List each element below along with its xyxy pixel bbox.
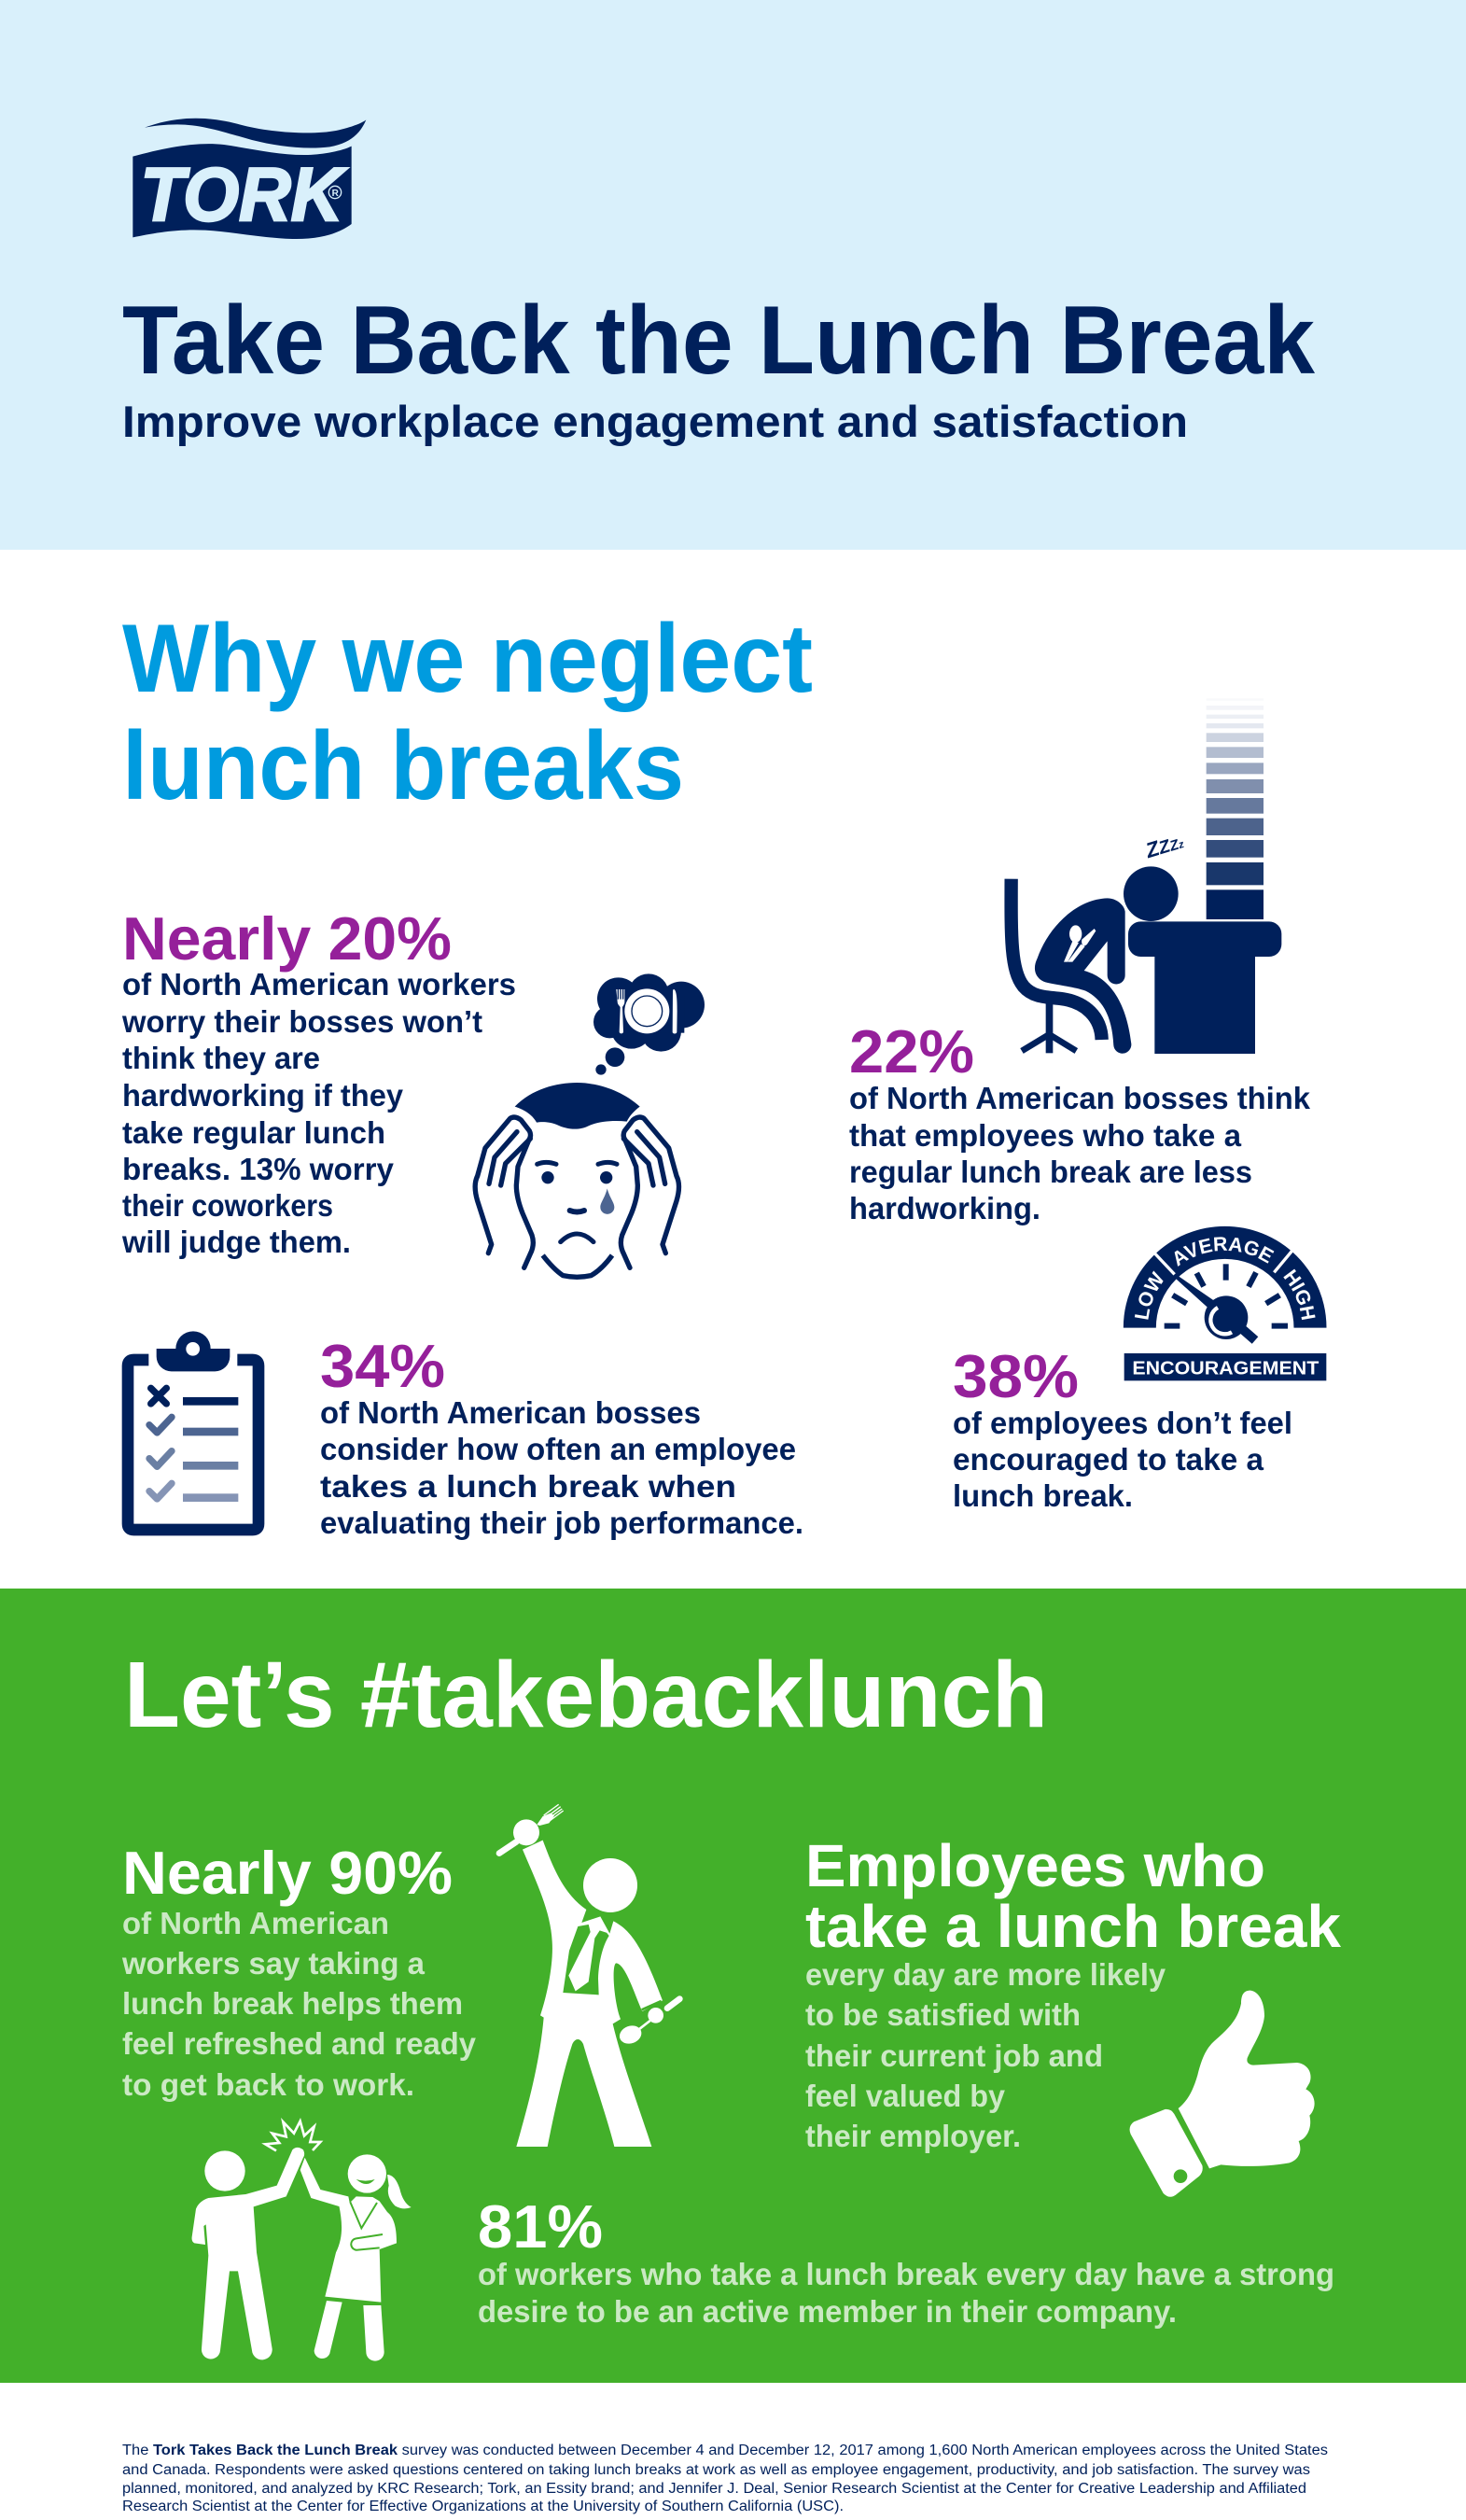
stat: 34%: consider how often an employee xyxy=(320,1432,796,1466)
panel: let's take back lunch xyxy=(0,1589,1466,2383)
panel: header xyxy=(0,0,1466,550)
stat: nearly 20%: worry their bosses won’t xyxy=(121,1004,482,1039)
stat: nearly 90%: to get back to work. xyxy=(122,2067,414,2102)
icon: two people high-fiving xyxy=(192,2121,412,2361)
stat: nearly 20%: breaks. 13% worry xyxy=(122,1152,395,1186)
stat: employees who take a lunch break: their employer. xyxy=(805,2119,1021,2153)
footnote: survey methodology: planned, monitored, and analyzed by KRC Research; Tork, an Essity brand; and Jennifer J. Deal, Senior Research Scientist at the Center for Creative Leadership and Affiliated xyxy=(122,2481,1306,2497)
stat: nearly 90%: workers say taking a xyxy=(121,1946,426,1981)
stat: nearly 90% xyxy=(121,1839,477,2102)
stat: 34%: 34% xyxy=(320,1332,445,1400)
stat: employees who take a lunch break: to be satisfied with xyxy=(805,1997,1081,2032)
heading: why we neglect: Why we neglect xyxy=(122,605,813,713)
stat: employees who take a lunch break xyxy=(805,1832,1341,2153)
heading: why we neglect: lunch breaks xyxy=(122,712,684,820)
logo: Tork: TORK xyxy=(141,153,347,237)
logo: Tork: R xyxy=(332,189,339,199)
panel: why we neglect lunch breaks xyxy=(121,605,1327,1540)
stat: 81%: of workers who take a lunch break every day have a strong xyxy=(478,2257,1334,2291)
footnote: survey methodology: The Tork Takes Back the Lunch Break survey was conducted between December 4 and December 12, 2017 among 1,600 North American employees across the United States xyxy=(122,2443,1328,2458)
stat: employees who take a lunch break: their current job and xyxy=(805,2038,1103,2073)
heading: why we neglect xyxy=(122,605,813,820)
stat: nearly 20% xyxy=(121,904,516,1259)
logo: Tork xyxy=(133,119,366,239)
subtitle: Improve workplace engagement and satisfaction xyxy=(122,397,1188,446)
stat: nearly 20%: will judge them. xyxy=(121,1225,351,1259)
stat: nearly 90%: feel refreshed and ready xyxy=(122,2026,477,2061)
stat: nearly 20%: think they are xyxy=(122,1041,320,1075)
stat: 22%: that employees who take a xyxy=(849,1118,1242,1153)
stat: 22%: of North American bosses think xyxy=(849,1081,1311,1115)
stat: 34%: of North American bosses xyxy=(320,1395,701,1430)
stat: employees who take a lunch break: feel valued by xyxy=(805,2079,1006,2113)
icon: encouragement gauge: LOW xyxy=(1135,1271,1163,1320)
footnote: survey methodology: and Canada. Respondents were asked questions centered on taking lunch breaks at work as well as employee engagement, productivity, and job satisfaction. The survey was xyxy=(122,2462,1310,2478)
stat: nearly 90%: of North American xyxy=(122,1906,389,1940)
icon: encouragement gauge: ENCOURAGEMENT xyxy=(1132,1357,1319,1379)
stat: 81% xyxy=(478,2192,1334,2329)
stat: 22%: regular lunch break are less xyxy=(849,1155,1252,1189)
stat: nearly 90%: lunch break helps them xyxy=(122,1986,463,2021)
stat: employees who take a lunch break: every day are more likely xyxy=(805,1957,1166,1992)
footnote: survey methodology: Research Scientist at the Center for Effective Organizations at the University of Southern California (USC). xyxy=(122,2499,844,2514)
icon: person asleep at desk with paper stack: ZZZz xyxy=(1142,828,1186,862)
stat: 22% xyxy=(849,1017,1311,1225)
stat: nearly 20%: of North American workers xyxy=(122,967,516,1001)
stat: 34%: takes a lunch break when xyxy=(320,1469,736,1504)
icon: worried face with thought cloud xyxy=(475,973,705,1277)
icon: encouragement gauge xyxy=(1124,1226,1327,1381)
stat: 38%: lunch break. xyxy=(953,1478,1133,1513)
heading: hashtag: Let’s #takebacklunch xyxy=(124,1643,1048,1747)
icon: man raising fork and spoon xyxy=(499,1804,679,2147)
stat: nearly 90%: Nearly 90% xyxy=(122,1839,453,1907)
icon: encouragement gauge: HIGH xyxy=(1283,1269,1316,1320)
stat: nearly 20%: Nearly 20% xyxy=(122,904,452,973)
icon: person asleep at desk with paper stack xyxy=(1012,698,1281,1054)
stat: nearly 20%: take regular lunch xyxy=(122,1115,385,1150)
stat: 38% xyxy=(953,1342,1292,1513)
stat: 22%: hardworking. xyxy=(849,1191,1040,1225)
stat: 22%: 22% xyxy=(849,1017,974,1085)
icon: encouragement gauge: AVERAGE xyxy=(1174,1237,1275,1267)
footnote: survey methodology xyxy=(122,2443,1328,2514)
stat: 81%: 81% xyxy=(478,2192,603,2261)
icon: clipboard checklist xyxy=(128,1331,258,1530)
stat: 38%: encouraged to take a xyxy=(953,1442,1264,1477)
stat: nearly 20%: their coworkers xyxy=(122,1188,333,1223)
stat: 34%: evaluating their job performance. xyxy=(320,1505,803,1540)
stat: 38%: 38% xyxy=(953,1342,1079,1410)
stat: employees who take a lunch break: take a lunch break xyxy=(805,1893,1341,1960)
stat: employees who take a lunch break: Employees who xyxy=(805,1832,1265,1899)
stat: 34% xyxy=(320,1332,803,1540)
title: Take Back the Lunch Break xyxy=(122,287,1315,395)
stat: nearly 20%: hardworking if they xyxy=(122,1078,404,1113)
stat: 81%: desire to be an active member in their company. xyxy=(478,2294,1177,2329)
icon: thumbs up xyxy=(1130,1991,1315,2197)
stat: 38%: of employees don’t feel xyxy=(953,1406,1292,1440)
